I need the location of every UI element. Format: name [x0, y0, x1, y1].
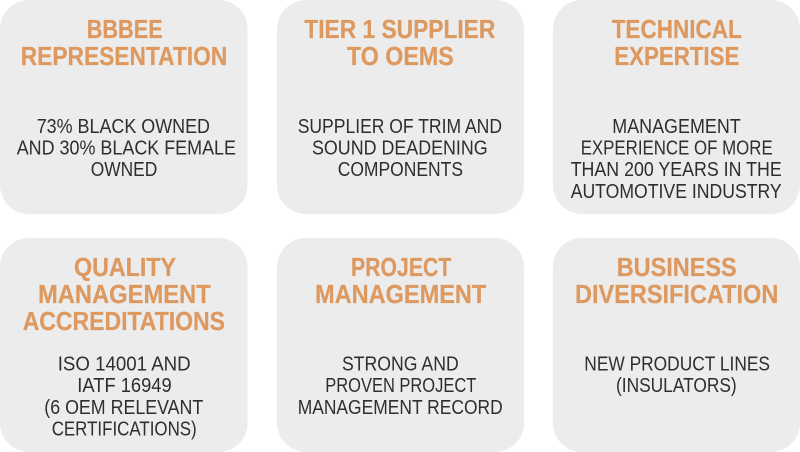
text: supplier description: [298, 116, 502, 181]
panel: Business diversification: [553, 238, 800, 452]
heading: Technical expertise: EXPERTISE: [614, 41, 739, 71]
heading: Business diversification: [575, 252, 778, 309]
heading: BBBEE representation: REPRESENTATION: [21, 41, 227, 71]
text: certifications: ISO 14001 AND: [58, 354, 191, 376]
text: supplier description: SOUND DEADENING: [312, 138, 488, 160]
heading: Quality management accreditations: [23, 252, 225, 336]
text: ownership: OWNED: [91, 159, 157, 181]
text: supplier description: COMPONENTS: [338, 159, 463, 181]
text: certifications: IATF 16949: [77, 375, 172, 397]
text: supplier description: SUPPLIER OF TRIM AND: [298, 116, 502, 138]
heading: Tier 1 supplier: TIER 1 SUPPLIER: [304, 14, 495, 44]
text: project record: PROVEN PROJECT: [325, 375, 476, 397]
text: ownership: 73% BLACK OWNED: [37, 116, 210, 138]
heading: Project management: PROJECT: [351, 252, 451, 282]
panel: Project management: [277, 238, 524, 452]
heading: Technical expertise: TECHNICAL: [612, 14, 742, 44]
text: management experience: MANAGEMENT: [612, 116, 741, 138]
panel: BBBEE representation: [0, 0, 248, 214]
heading: Tier 1 supplier: [304, 14, 495, 71]
text: product lines: [584, 354, 770, 397]
text: management experience: [571, 116, 782, 203]
panel: Quality management accreditations: [0, 238, 248, 452]
heading: Technical expertise: [612, 14, 742, 71]
heading: Quality management accreditations: MANAGEMENT: [38, 279, 211, 309]
text: certifications: CERTIFICATIONS): [52, 418, 197, 440]
heading: BBBEE representation: [21, 14, 227, 71]
heading: Project management: [315, 252, 486, 309]
heading: Quality management accreditations: QUALITY: [74, 252, 176, 282]
panel: Tier 1 supplier: [277, 0, 524, 214]
text: product lines: NEW PRODUCT LINES: [584, 354, 770, 376]
text: certifications: (6 OEM RELEVANT: [44, 397, 203, 419]
text: project record: [298, 354, 503, 419]
heading: Project management: MANAGEMENT: [315, 279, 486, 309]
heading: Tier 1 supplier: TO OEMS: [347, 41, 454, 71]
text: ownership: [17, 116, 236, 181]
heading: Quality management accreditations: ACCREDITATIONS: [23, 306, 225, 336]
text: ownership: AND 30% BLACK FEMALE: [17, 138, 236, 160]
heading: Business diversification: DIVERSIFICATION: [575, 279, 778, 309]
heading: BBBEE representation: BBBEE: [87, 14, 163, 44]
text: project record: MANAGEMENT RECORD: [298, 397, 503, 419]
text: certifications: [44, 354, 203, 440]
text: product lines: (INSULATORS): [616, 375, 737, 397]
panel: Technical expertise: [553, 0, 800, 214]
text: project record: STRONG AND: [342, 354, 459, 376]
heading: Business diversification: BUSINESS: [617, 252, 737, 282]
